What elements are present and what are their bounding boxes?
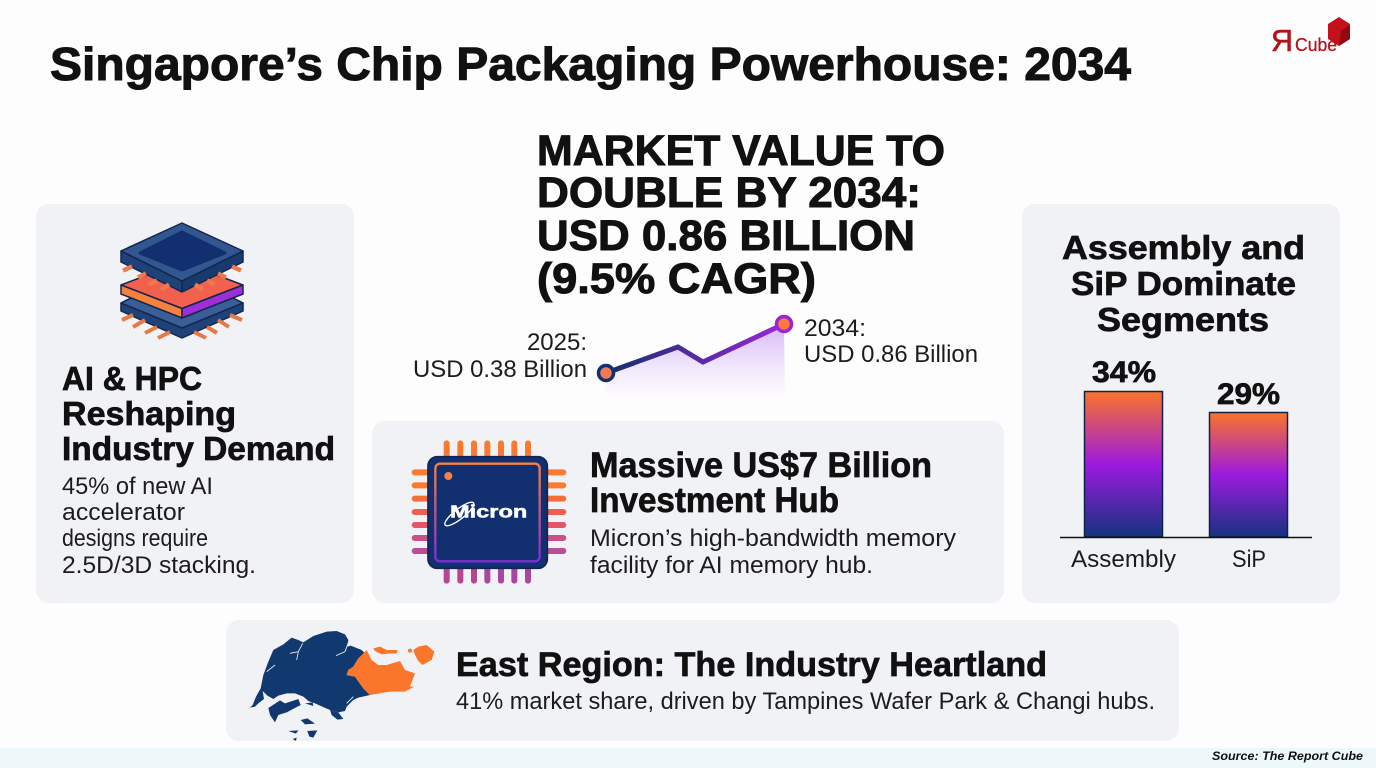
- heading: investment hub: Investment Hub: [590, 481, 839, 520]
- chart label: 2025 value: 2025:: [527, 329, 587, 356]
- heading: assembly and SiP: Segments: [1097, 301, 1269, 338]
- chart line: [606, 324, 784, 373]
- chart label: 2025 value: [413, 329, 587, 383]
- panel: AI and HPC demand: [36, 204, 354, 603]
- panel background: [372, 421, 1004, 603]
- chart label: 2025 value: USD 0.38 Billion: [413, 356, 587, 383]
- bar: SiP 29%: [1210, 378, 1288, 573]
- body text: memory facility: [590, 525, 956, 579]
- logo: RCube: Cube: [1295, 35, 1337, 55]
- logo: RCube: Я: [1271, 23, 1293, 58]
- heading: investment hub: Massive US$7 Billion: [590, 446, 932, 485]
- logo: RCube: [1271, 17, 1350, 58]
- line chart: market growth 2025 to 2034: [413, 315, 978, 400]
- chart area fill: [606, 324, 785, 400]
- body text: market share: 41% market share, driven by Tampines Wafer Park & Changi hubs.: [456, 688, 1155, 715]
- headline: market value: USD 0.86 BILLION: [537, 212, 915, 260]
- heading: AI and HPC: Industry Demand: [62, 430, 335, 467]
- chart end marker: [776, 316, 792, 332]
- bar: SiP 29%: 29%: [1217, 378, 1280, 411]
- bar: Assembly 34%: 34%: [1092, 356, 1156, 389]
- chart label: 2034 value: USD 0.86 Billion: [804, 341, 978, 368]
- body text: stacking statistic: accelerator: [62, 499, 185, 526]
- heading: AI and HPC: [62, 360, 335, 467]
- heading: assembly and SiP: SiP Dominate: [1071, 265, 1296, 302]
- panel background: [36, 204, 354, 603]
- body text: memory facility: facility for AI memory hub.: [590, 552, 873, 579]
- panel: segments: [1022, 204, 1340, 603]
- icon: stacked chip layers: [121, 223, 243, 338]
- body text: memory facility: Micron’s high-bandwidth memory: [590, 525, 956, 552]
- icon: Micron chip: Micron: [450, 502, 527, 522]
- heading: AI and HPC: Reshaping: [62, 395, 236, 432]
- icon: Micron chip: [415, 443, 563, 581]
- panel background: [1022, 204, 1340, 603]
- body text: stacking statistic: designs require: [62, 525, 208, 552]
- heading: East Region: East Region: The Industry Heartland: [456, 646, 1047, 684]
- bar: Assembly 34%: [1071, 356, 1176, 573]
- heading: AI and HPC: AI & HPC: [62, 360, 202, 397]
- heading: assembly and SiP: Assembly and: [1062, 229, 1305, 266]
- body text: stacking statistic: 45% of new AI: [62, 473, 213, 500]
- heading: assembly and SiP: [1062, 229, 1305, 338]
- headline: market value: [537, 127, 945, 303]
- source note: Source: The Report Cube: [1212, 749, 1363, 763]
- headline: market value: DOUBLE BY 2034:: [537, 169, 921, 217]
- bar: Assembly 34%: Assembly: [1071, 546, 1176, 573]
- panel: Micron investment: [372, 421, 1004, 603]
- title: Singapore’s Chip Packaging Powerhouse: 2034: [50, 38, 1131, 90]
- footer band: [0, 748, 1376, 768]
- body text: stacking statistic: 2.5D/3D stacking.: [62, 552, 256, 579]
- headline: market value: (9.5% CAGR): [537, 255, 816, 303]
- body text: stacking statistic: [62, 473, 256, 579]
- headline: market value: MARKET VALUE TO: [537, 127, 945, 175]
- chart axis: [1060, 536, 1312, 538]
- bar chart: segment shares: [1060, 356, 1312, 573]
- chart label: 2034 value: [804, 315, 978, 368]
- panel background: [226, 620, 1179, 741]
- icon: Singapore map: [250, 631, 434, 741]
- chart start marker: [598, 366, 614, 380]
- bar: SiP 29%: SiP: [1232, 546, 1266, 573]
- heading: investment hub: [590, 446, 932, 520]
- chart label: 2034 value: 2034:: [804, 315, 866, 342]
- panel: East Region: [226, 620, 1179, 741]
